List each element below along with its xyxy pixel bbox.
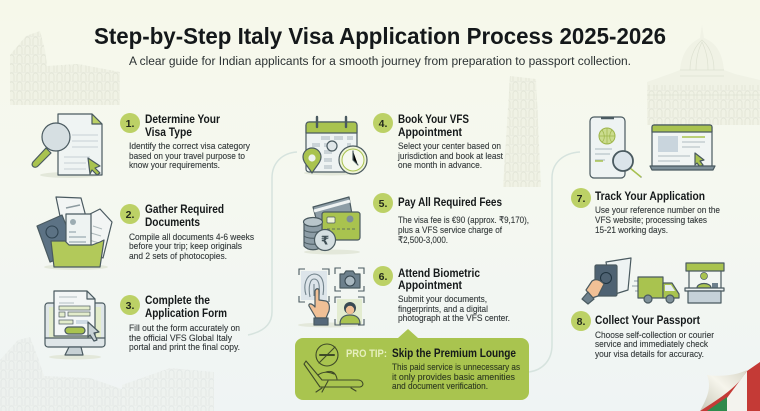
text 5: ₹2,500-3,000. [398,234,448,245]
connector: column 2 to column 3 [529,152,580,372]
badge 8: 8. [577,316,585,328]
text 4: jurisdiction and book at least [397,150,503,161]
badge 1: 1. [126,118,134,130]
step 5 [304,193,529,254]
text 7: Use your reference number on the [595,204,720,215]
badge 4: 4. [379,118,387,130]
icon: passport in hand, delivery truck and collection kiosk [582,258,724,304]
icon: computer with application form [45,291,105,360]
icon: phone, magnifier and laptop [590,117,715,178]
badge 8 [571,311,591,331]
heading 2: Gather Required [145,202,224,216]
icon: crossed-out lounge chair [304,344,363,392]
text 4: one month in advance. [398,159,482,170]
step 2 [37,197,254,270]
heading 8: Collect Your Passport [595,313,700,327]
callout panel [295,329,529,400]
text 4: Select your center based on [398,140,501,151]
text 2: before your trip; keep originals [129,240,242,251]
icon: fingerprint, camera and photo capture [298,268,364,328]
pro tip callout [295,329,529,400]
heading 3: Complete the [145,293,210,307]
badge 7 [571,188,591,208]
heading 5: Pay All Required Fees [398,195,502,209]
step 6 [298,266,510,328]
text 1: Identify the correct visa category [129,140,250,151]
badge 4 [373,113,393,133]
heading 1: Determine Your [145,112,220,126]
text 7: 15-21 working days. [595,224,668,235]
landmark: Colosseum top left [10,31,120,105]
pro tip label: PRO TIP: [346,348,387,360]
heading 3: Application Form [145,306,227,320]
badge 5 [373,193,393,213]
badge 3: 3. [126,300,134,312]
text 8: Choose self-collection or courier [595,329,714,340]
badge 2 [120,204,140,224]
pro tip text: it only provides basic amenities [392,371,515,382]
badge 6: 6. [379,271,387,283]
pro tip heading: Skip the Premium Lounge [392,348,516,360]
step 8 [571,258,724,359]
text 1: based on your travel purpose to [129,150,245,161]
text 8: your visa details for accuracy. [595,348,704,359]
text 7: VFS website; processing takes [595,214,707,225]
connector: column 1 to column 2 [248,152,297,335]
heading 6: Attend Biometric [398,266,480,280]
step 4 [303,112,503,176]
icon: passport, documents and folder [37,197,112,270]
step 1 [32,112,250,178]
badge 7: 7. [577,193,585,205]
landmark: Colosseum bottom left [0,337,130,411]
text 6: photograph at the VFS center. [398,312,510,323]
title: Step-by-Step Italy Visa Application Process 2025-2026 [94,23,666,49]
subtitle: A clear guide for Indian applicants for a smooth journey from preparation to passport collection. [129,54,631,68]
text 6: fingerprints, and a digital [398,303,488,314]
heading 4: Book Your VFS [398,112,469,126]
heading 7: Track Your Application [595,189,705,203]
badge 6 [373,266,393,286]
text 3: the official VFS Global Italy [129,332,232,343]
icon: calendar, location pin and clock [303,117,367,176]
text 1: know your requirements. [129,159,220,170]
pro tip text: and document verification. [392,380,488,391]
text 3: Fill out the form accurately on [129,322,240,333]
heading 4: Appointment [398,125,462,139]
text 2: and 2 sets of photocopies. [129,250,227,261]
page curl with Italian flag corner [700,362,760,411]
icon: cards, coins and rupee: ₹ [321,234,329,248]
heading 6: Appointment [398,278,462,292]
heading 1: Visa Type [145,125,192,139]
icon: cards, coins and rupee [304,197,360,254]
text 2: Compile all documents 4-6 weeks [129,231,254,242]
text 8: service and immediately check [595,338,708,349]
text 3: portal and print the final copy. [129,341,240,352]
text 5: plus a VFS service charge of [398,224,502,235]
pro tip text: This paid service is unnecessary as [392,361,520,372]
landmark: Leaning Tower of Pisa [503,76,541,187]
step 7 [571,117,720,235]
landmark: Pantheon bottom [122,368,214,411]
icon: document and magnifier [32,114,102,178]
heading 2: Documents [145,215,200,229]
landmark: St Peter's Basilica top right [647,25,760,125]
badge 1 [120,113,140,133]
text 6: Submit your documents, [398,293,487,304]
badge 2: 2. [126,209,134,221]
badge 5: 5. [379,198,387,210]
badge 3 [120,295,140,315]
step 3 [45,291,240,360]
text 5: The visa fee is €90 (approx. ₹9,170), [398,214,529,225]
